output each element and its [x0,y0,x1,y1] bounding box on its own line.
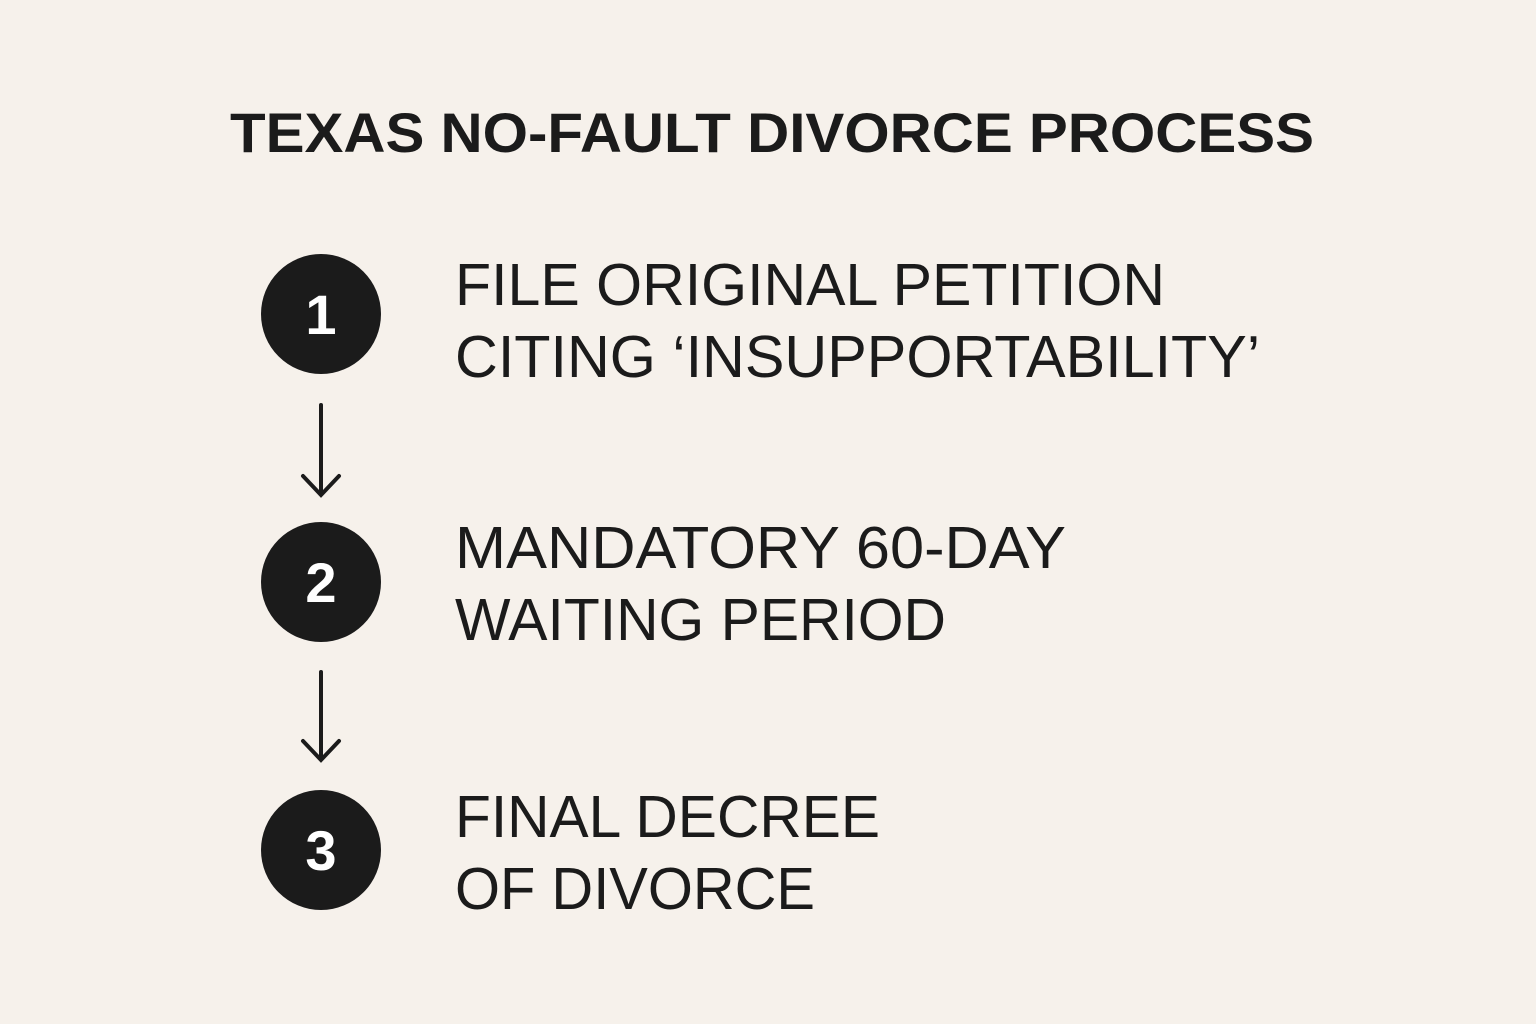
arrow 1 [303,405,339,495]
icon: circle 2 [261,522,381,642]
icon: circle 2: 2 [305,551,337,614]
arrow 2 [303,672,339,760]
icon: circle 3: 3 [305,819,337,882]
text: step 3: OF DIVORCE [455,856,815,922]
text: step 3 [455,784,880,922]
step 1 [261,252,1260,390]
icon: circle 1 [261,254,381,374]
text: step 1 [455,252,1260,390]
icon: circle 3 [261,790,381,910]
text: step 2: WAITING PERIOD [455,587,946,653]
text: step 2: MANDATORY 60-DAY [455,515,1066,581]
step 2 [261,515,1066,653]
text: step 2 [455,515,1066,653]
text: step 1: FILE ORIGINAL PETITION [455,252,1165,318]
text: step 1: CITING ‘INSUPPORTABILITY’ [455,324,1260,390]
title: TEXAS NO-FAULT DIVORCE PROCESS [230,101,1314,164]
icon: circle 1: 1 [305,283,337,346]
step 3 [261,784,880,922]
text: step 3: FINAL DECREE [455,784,880,850]
